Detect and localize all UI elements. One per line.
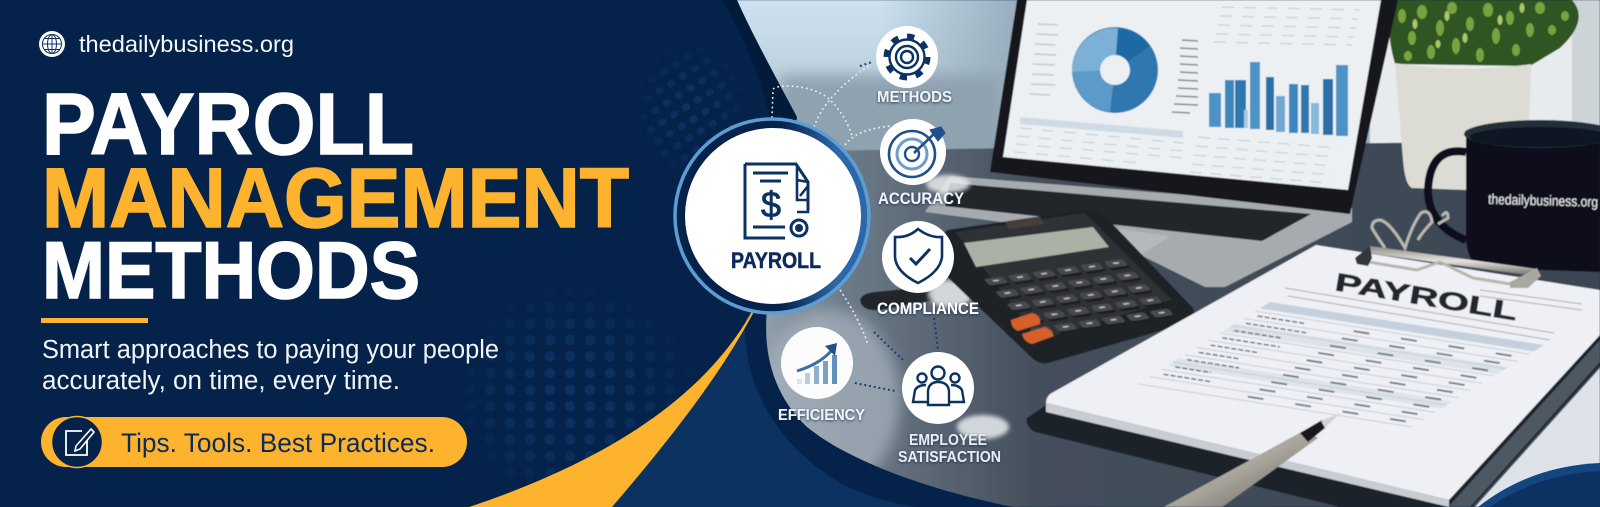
icon: pencil note: [52, 416, 102, 468]
node: methods: [876, 26, 952, 106]
clipboard board: [1027, 335, 1600, 507]
clipboard lit edge: [1448, 340, 1600, 507]
icon: shield: [895, 229, 942, 283]
gold swoosh: [469, 302, 759, 507]
paper table lines: [1138, 302, 1544, 427]
paper heading: PAYROLL: [1333, 268, 1519, 326]
screen table rows: [1014, 7, 1360, 183]
employee satisfaction label: EMPLOYEE: [909, 432, 987, 449]
icon: people: [913, 366, 964, 405]
title: [42, 76, 629, 316]
payroll paper: [1046, 245, 1600, 500]
subtitle: [42, 336, 499, 395]
halftone dot texture: [360, 40, 750, 507]
icon: payroll document: $: [761, 184, 781, 225]
clipboard clip: [1355, 212, 1541, 288]
plant pot: [1395, 63, 1531, 190]
bar chart: [1209, 62, 1348, 136]
donut chart: [1072, 27, 1158, 113]
orange keys: [1011, 313, 1040, 331]
methods label: METHODS: [877, 89, 952, 106]
bottom-right navy corner: [1478, 463, 1600, 507]
efficiency label: EFFICIENCY: [778, 407, 865, 424]
laptop bezel: [990, 0, 1398, 214]
paper header rules: [1285, 288, 1582, 340]
icon: rising bar chart: [797, 343, 837, 384]
subtitle: accurately, on time, every time.: [42, 367, 400, 395]
desk mouse highlights: [926, 175, 1009, 439]
desk corner light: [1475, 368, 1600, 507]
icon: globe: [39, 31, 65, 57]
calculator: [935, 209, 1194, 363]
desk light reflection: [768, 305, 906, 469]
blurred wall background: [737, 0, 1600, 151]
calculator display: [964, 227, 1109, 267]
mug handle: [1428, 151, 1466, 240]
title: MANAGEMENT: [42, 151, 629, 245]
site name: thedailybusiness.org: [79, 31, 294, 57]
central payroll badge: [675, 119, 869, 313]
subtitle: Smart approaches to paying your people: [42, 336, 499, 364]
tagline pill: [41, 416, 467, 468]
node: accuracy: [878, 119, 964, 208]
gold rule: [41, 318, 148, 323]
laptop keyboard: [945, 183, 1311, 241]
title: METHODS: [42, 226, 420, 316]
site badge: [39, 31, 294, 57]
tagline: Tips. Tools. Best Practices.: [121, 428, 435, 458]
desk surface: [730, 140, 1600, 507]
compliance label: COMPLIANCE: [877, 299, 979, 318]
icon: gear: [887, 37, 927, 77]
node: compliance: [877, 221, 979, 318]
lower navy wave panel: [605, 303, 915, 507]
payroll label: PAYROLL: [731, 248, 821, 273]
badge ring: [675, 119, 869, 313]
screen table header: [1020, 117, 1183, 138]
laptop trackpad: [1118, 230, 1168, 254]
icon: target: [889, 127, 945, 177]
node: efficiency: [778, 327, 865, 424]
node: employee satisfaction: [898, 352, 1001, 466]
black pen on desk: [860, 286, 935, 310]
employee satisfaction label: SATISFACTION: [898, 449, 1001, 466]
silver pen: [1164, 413, 1340, 507]
mug: [1428, 120, 1600, 272]
employee satisfaction label: [898, 432, 1001, 466]
desk photo scene: [730, 0, 1600, 507]
dark swoosh band: [722, 0, 800, 130]
calculator solar panel: [1005, 217, 1044, 229]
plant: [1389, 0, 1579, 66]
icon: payroll document: [745, 164, 808, 238]
laptop screen: [1003, 0, 1381, 190]
accuracy label: ACCURACY: [878, 190, 964, 208]
title: PAYROLL: [42, 76, 414, 173]
laptop base: [925, 176, 1352, 287]
dotted connector lines: [772, 62, 938, 391]
